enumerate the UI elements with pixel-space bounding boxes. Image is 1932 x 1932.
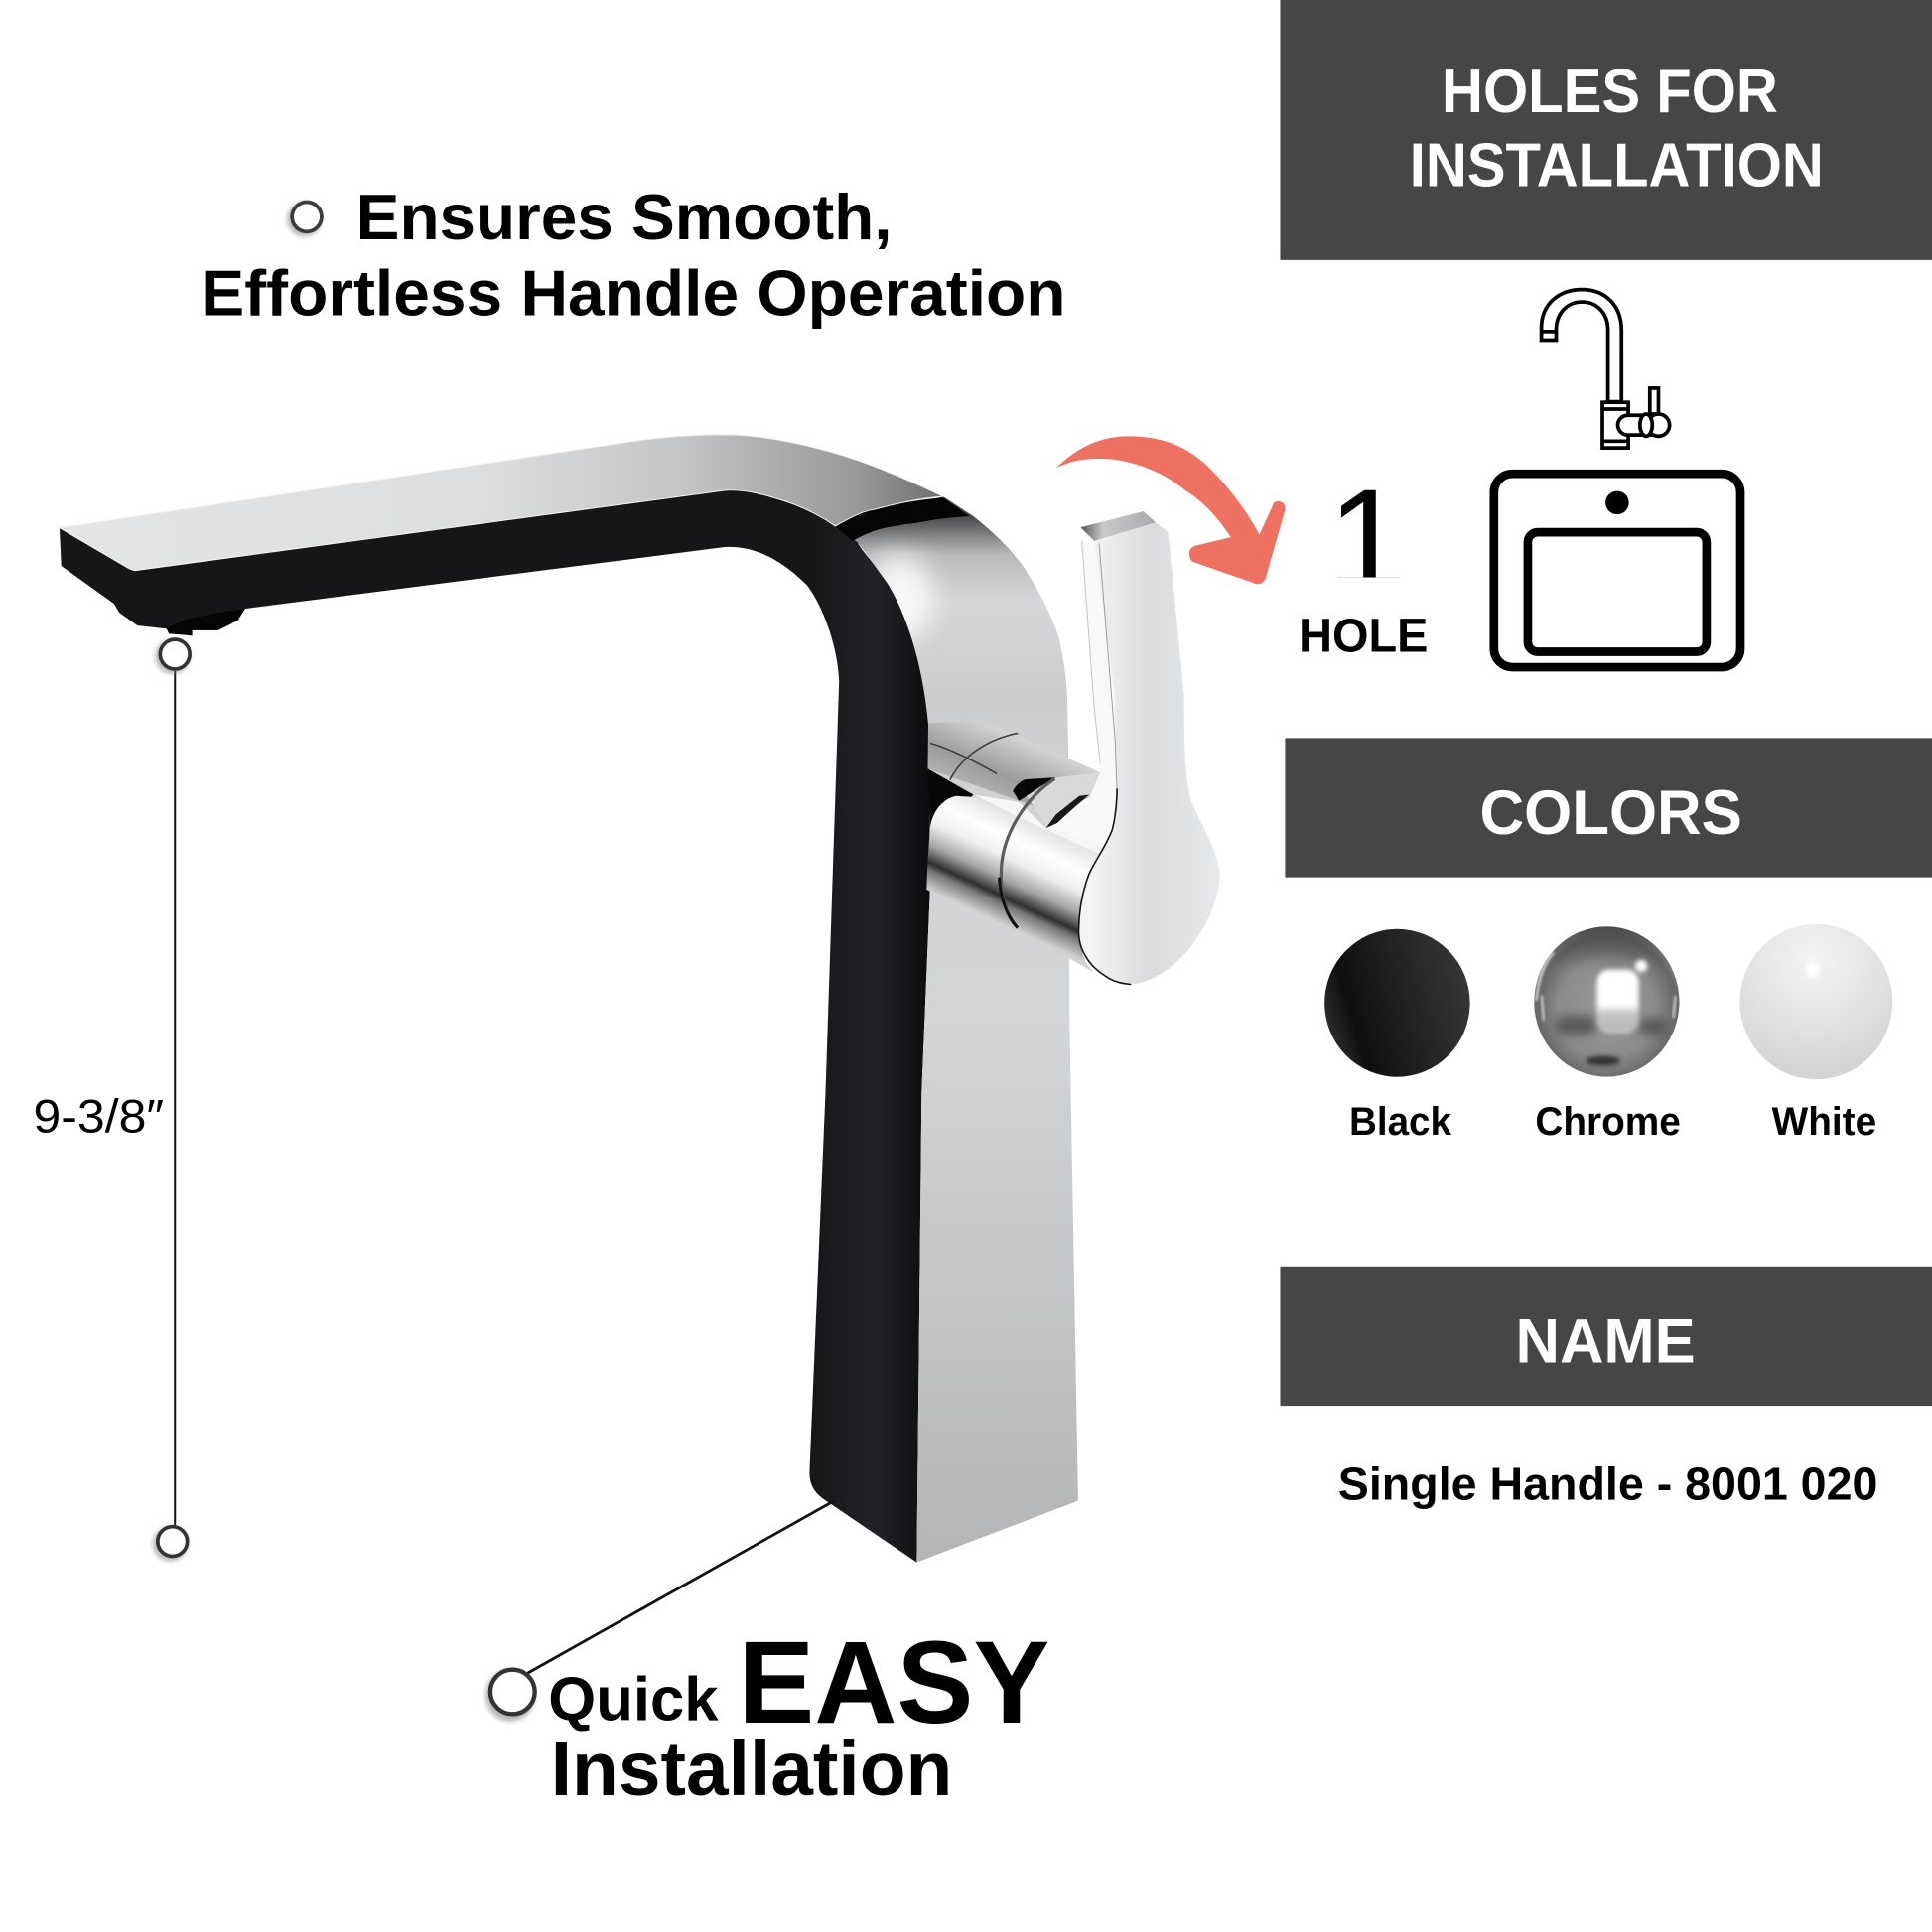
handle: dark reflection	[1013, 777, 1056, 801]
panel: holes for installation	[1280, 0, 1932, 260]
leader line with marker: quick easy installation	[485, 1501, 834, 1722]
label: 1 hole	[1302, 490, 1427, 652]
swatch labels: Chrome	[1535, 1100, 1681, 1144]
lever: contour line	[1078, 788, 1131, 985]
panel: holes for installation: INSTALLATION	[1410, 131, 1824, 200]
headline: ensures smooth handle operation: Effortless Handle Operation	[201, 258, 1066, 330]
swatch: black	[1324, 929, 1470, 1077]
model name text: Single Handle - 8001 020	[1338, 1457, 1877, 1509]
swatch: chrome	[1534, 926, 1680, 1077]
handle: cylinder	[926, 796, 1099, 973]
marker: headline bullet	[287, 203, 322, 236]
faucet: aerator detail	[167, 609, 245, 635]
handle: ring collar	[1001, 778, 1054, 928]
panel: colors heading: COLORS	[1480, 778, 1742, 848]
panel: holes for installation: HOLES FOR	[1442, 58, 1778, 126]
swatch labels	[1349, 1100, 1876, 1144]
callout: quick easy installation: EASY	[738, 1616, 1049, 1747]
faucet product image	[60, 435, 1220, 1565]
callout: quick easy installation: Installation	[551, 1726, 952, 1812]
faucet: chrome side face	[854, 496, 1078, 1563]
faucet: reflective dark band	[835, 497, 970, 541]
label: 1 hole: HOLE	[1299, 610, 1428, 663]
panel: name heading	[1280, 1267, 1932, 1406]
panel: name heading: NAME	[1516, 1308, 1696, 1377]
panel: colors heading	[1285, 738, 1932, 878]
handle: dark gap	[928, 768, 973, 838]
swatch: white	[1739, 924, 1892, 1079]
headline: ensures smooth handle operation	[201, 182, 1066, 330]
lever: top cap	[1080, 511, 1156, 541]
swatch labels: White	[1772, 1100, 1876, 1144]
dimension label: 9-3/8″	[34, 1090, 164, 1143]
label: 1 hole: 1	[1327, 461, 1407, 619]
callout: quick easy installation: Quick	[548, 1666, 719, 1734]
handle: cone collar	[928, 722, 1100, 814]
lever: neck	[1046, 541, 1118, 840]
swatch labels: Black	[1349, 1100, 1452, 1144]
handle: clip piece	[1027, 772, 1100, 827]
dimension line: height 9-3/8	[153, 639, 190, 1561]
handle: collar grooves	[930, 733, 1018, 780]
headline: ensures smooth handle operation: Ensures Smooth,	[356, 182, 893, 253]
handle: white strip	[973, 794, 1103, 858]
icon: gooseneck faucet	[1542, 290, 1670, 448]
callout: quick easy installation	[548, 1616, 1049, 1812]
faucet: black body and spout	[60, 486, 930, 1563]
icon: sink with one hole	[1494, 474, 1740, 667]
faucet: top face of spout	[60, 435, 943, 571]
lever: main paddle	[1078, 522, 1220, 985]
arrow: downward handle motion	[1056, 436, 1286, 584]
